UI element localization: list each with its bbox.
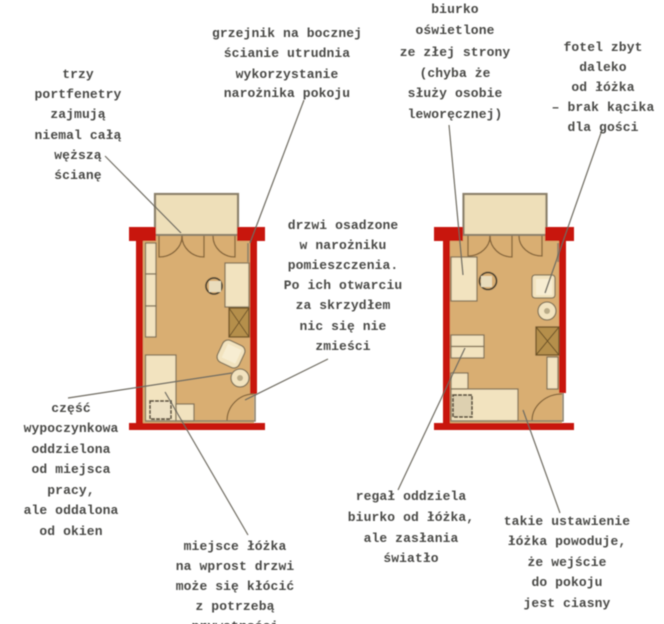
text: desk note: biurko [431, 2, 479, 17]
shelves [146, 243, 156, 337]
bookcase divider [451, 335, 484, 358]
text: door note: w narożniku [300, 238, 386, 253]
text: armchair note [552, 40, 654, 135]
text: desk note: leworęcznej) [408, 107, 502, 122]
floor plan: left room [129, 194, 265, 430]
text: door note: nic się nie [300, 319, 387, 334]
text: desk note [400, 2, 510, 122]
window doors [468, 236, 542, 257]
text: door note: za skrzydłem [296, 298, 390, 313]
text: armchair note: dla gości [567, 120, 639, 135]
text: armchair note: fotel zbyt [563, 40, 643, 55]
text: door note: pomieszczenia. [288, 258, 398, 273]
floor [450, 236, 562, 423]
text: bookcase note: regał oddziela [356, 489, 466, 504]
walls [434, 227, 574, 430]
text: windows note: zajmują [50, 107, 106, 122]
text: lounge note: część [51, 401, 91, 416]
text: lounge note: pracy, [47, 483, 95, 498]
text: bed placement note: z potrzebą [195, 599, 275, 614]
text: desk note: ze złej strony [400, 45, 510, 60]
nightstand [451, 373, 468, 389]
text: entrance note: łóżka powoduje, [508, 534, 626, 549]
pillow [150, 401, 171, 419]
text: lounge note: ale oddalona [24, 503, 118, 518]
bed [146, 355, 176, 421]
text: desk note: oświetlone [415, 23, 495, 38]
round table [538, 302, 556, 320]
desk [225, 263, 249, 307]
text: entrance note: takie ustawienie [504, 514, 630, 529]
text: bed placement note: na wprost drzwi [176, 559, 294, 574]
text: radiator note: grzejnik na bocznej [212, 26, 362, 41]
bed [451, 389, 518, 421]
text: radiator note: ścianie utrudnia [224, 46, 350, 61]
text: armchair note: – brak kącika [552, 100, 654, 115]
text: radiator note: narożnika pokoju [224, 86, 350, 101]
entrance door [145, 394, 255, 421]
text: windows note: niemal całą [35, 128, 122, 143]
text: door note: zmieści [315, 339, 371, 354]
text: radiator note [212, 26, 362, 101]
text: windows note [35, 67, 122, 183]
floor plan: right room [434, 194, 574, 430]
armchair [215, 338, 247, 370]
wall stub [247, 243, 249, 262]
text: lounge note [24, 401, 118, 539]
text: bookcase note [348, 489, 474, 566]
narrow shelf [547, 357, 558, 389]
callout lines [68, 100, 602, 535]
floor [143, 236, 254, 423]
text: entrance note [504, 514, 630, 611]
desk chair [480, 272, 496, 290]
balcony [155, 194, 238, 235]
balcony [464, 194, 546, 235]
text: windows note: ścianę [54, 168, 102, 183]
desk chair [206, 278, 222, 294]
text: entrance note: do pokoju [531, 575, 603, 590]
text: door note: Po ich otwarciu [284, 278, 402, 293]
armchair [532, 275, 555, 298]
text: windows note: trzy [62, 67, 94, 82]
text: windows note: portfenetry [35, 87, 122, 102]
text: bed placement note: może się kłócić [176, 579, 294, 594]
desk [451, 257, 477, 301]
text: lounge note: od miejsca [31, 462, 111, 477]
text: armchair note: daleko [579, 60, 627, 75]
round table [231, 369, 249, 387]
pillow [453, 395, 472, 417]
text: armchair note: od łóżka [571, 80, 635, 95]
text: lounge note: wypoczynkowa [24, 421, 118, 436]
text: desk note: służy osobie [408, 86, 502, 101]
text: entrance note: jest ciasny [524, 596, 611, 611]
wall stub [557, 243, 559, 262]
crate [536, 327, 559, 355]
text: door note [284, 218, 402, 354]
text: lounge note: od okien [39, 524, 103, 539]
crate [229, 308, 249, 337]
window doors [159, 236, 235, 257]
text: bed placement note [176, 539, 294, 624]
entrance door [451, 393, 563, 421]
nightstand [176, 404, 194, 421]
walls [129, 227, 265, 430]
text: bookcase note: światło [383, 551, 439, 566]
text: desk note: (chyba że [419, 66, 491, 81]
text: bookcase note: biurko od łóżka, [348, 510, 474, 525]
text: entrance note: że wejście [527, 555, 607, 570]
text: bookcase note: ale zasłania [364, 531, 458, 546]
text: windows note: węższą [54, 148, 102, 163]
text: radiator note: wykorzystanie [236, 67, 338, 82]
text: bed placement note: miejsce łóżka [184, 539, 286, 554]
text: lounge note: oddzielona [31, 442, 111, 457]
text: door note: drzwi osadzone [288, 218, 398, 233]
